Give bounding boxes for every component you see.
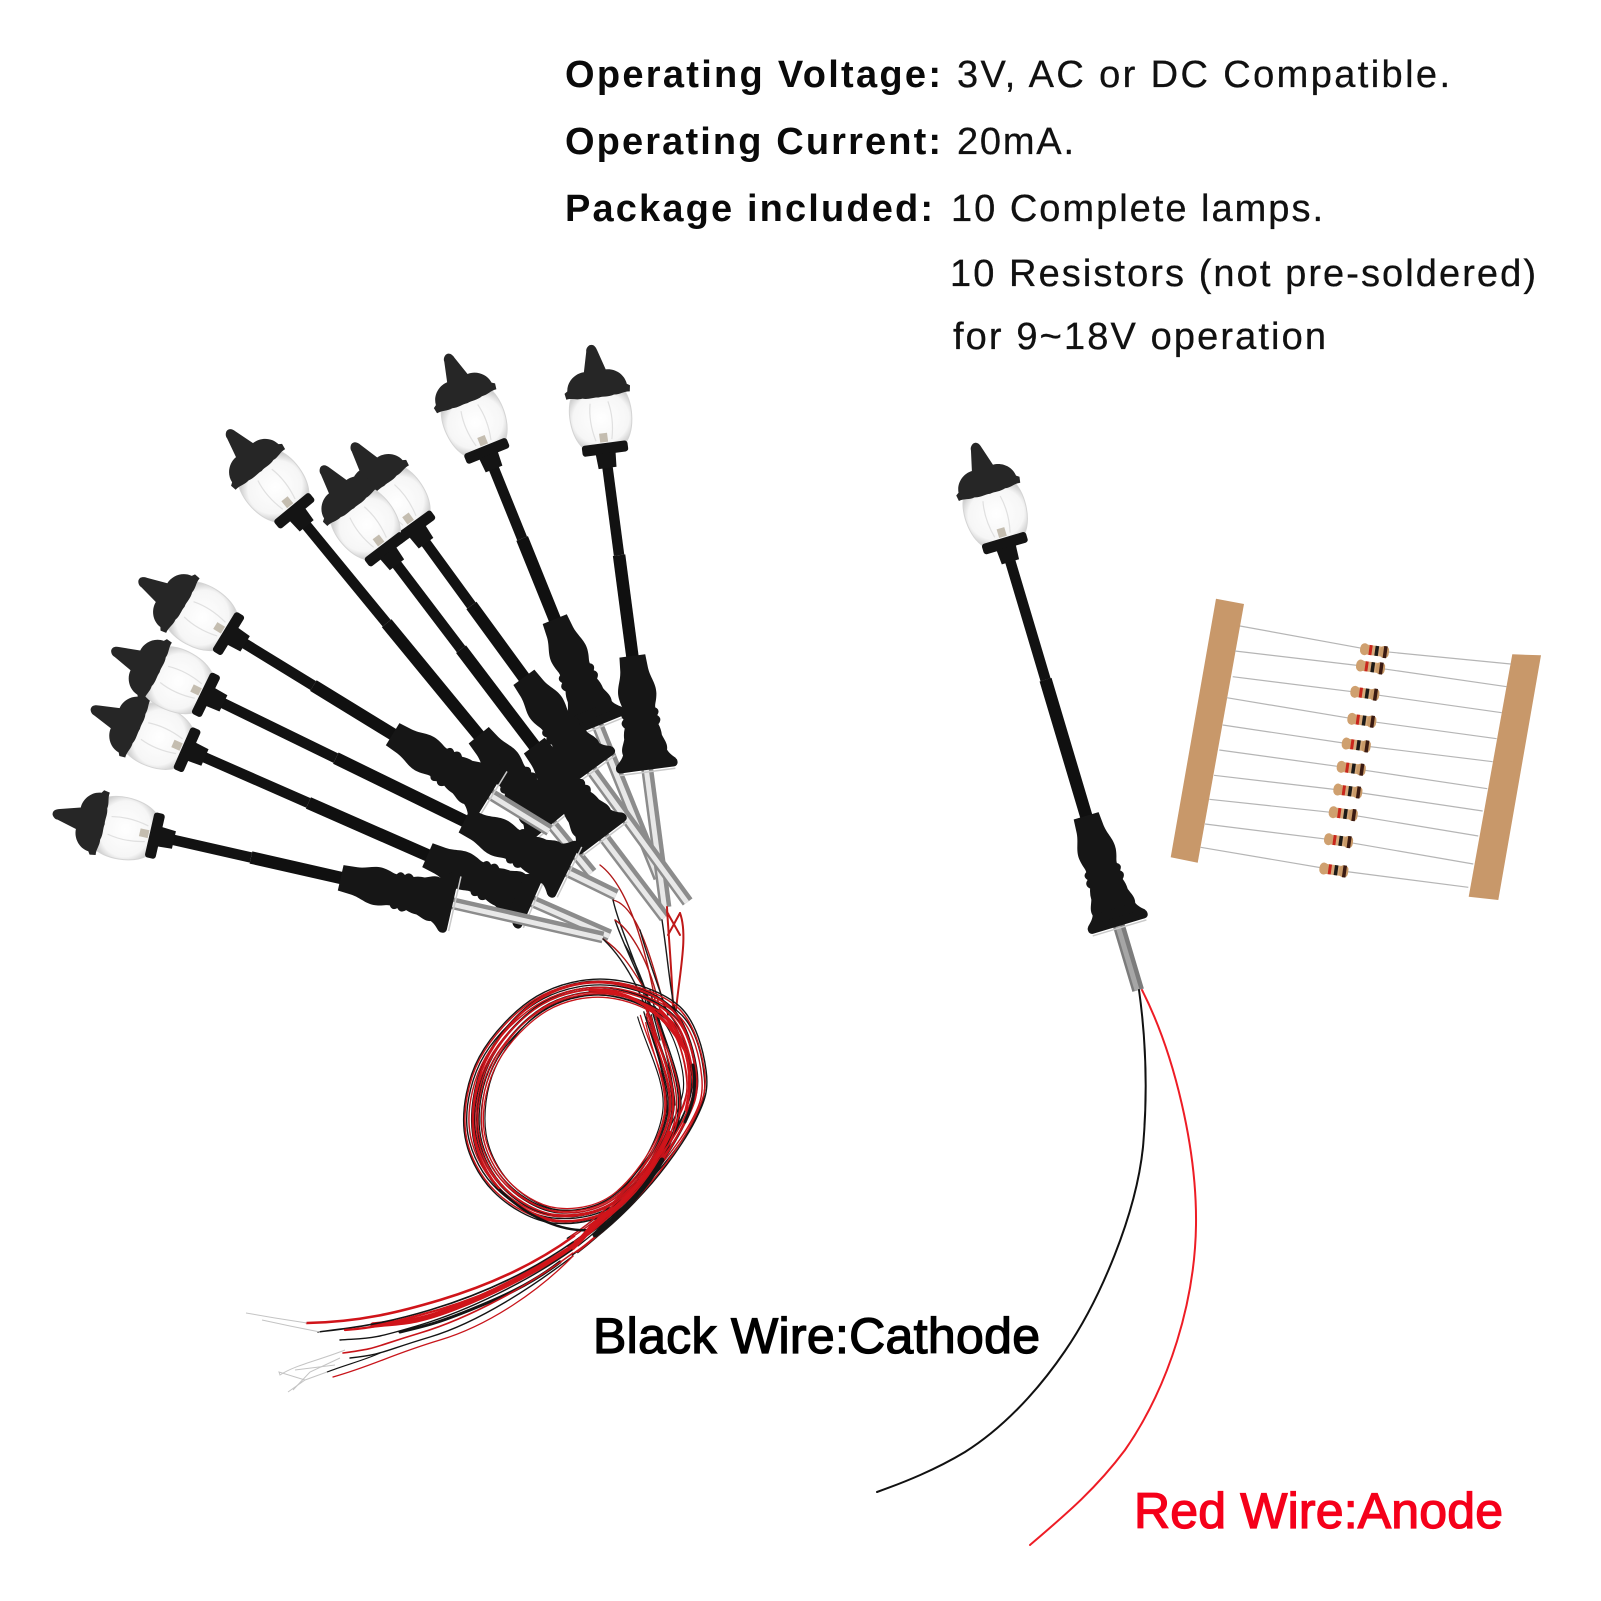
lamp I: [45, 780, 610, 970]
heading: specifications text block: [565, 54, 1536, 358]
lamp C: [326, 423, 714, 921]
lamp A: [559, 341, 698, 911]
lamp H: [78, 677, 623, 965]
right paper tape: [1469, 654, 1541, 900]
resistor bodies: [1319, 643, 1390, 878]
lamp E: [202, 409, 617, 894]
wire bundle with loop and tail: [246, 865, 709, 1392]
resistor strip: [1171, 599, 1541, 900]
package included line: Package included:: [565, 188, 933, 230]
operating current line: Operating Current:: [565, 121, 941, 163]
bundle of nine lamps: [45, 341, 714, 970]
black wire: [877, 990, 1146, 1492]
package included line: [565, 188, 1323, 230]
resistor leads: [1201, 626, 1511, 887]
lamp B: [417, 341, 690, 890]
thick merged strands of the tail: [307, 990, 695, 1377]
red wire: [1030, 990, 1196, 1545]
black strands of the loop: [461, 978, 709, 1256]
operating current line: 20mA.: [957, 121, 1074, 163]
lamp G: [97, 619, 631, 925]
lamp D: [296, 446, 691, 938]
lamp body: [943, 433, 1170, 1000]
stripped wire tips: [246, 1313, 345, 1392]
resistors line: 10 Resistors (not pre-soldered): [950, 253, 1536, 295]
label: red wire anode: Red Wire:Anode: [1134, 1483, 1503, 1539]
operating voltage line: [565, 54, 1450, 96]
lamp F: [122, 551, 567, 858]
package included line: 10 Complete lamps.: [951, 188, 1323, 230]
single lamp detail: [877, 433, 1196, 1545]
red strands of the loop: [462, 979, 708, 1255]
fan of wires from lamp tubes: [600, 865, 683, 1115]
label: black wire cathode: Black Wire:Cathode: [593, 1308, 1040, 1364]
operation voltage line: for 9~18V operation: [953, 316, 1326, 358]
left paper tape: [1171, 599, 1244, 863]
operating voltage line: Operating Voltage:: [565, 54, 941, 96]
operating voltage line: 3V, AC or DC Compatible.: [957, 54, 1450, 96]
